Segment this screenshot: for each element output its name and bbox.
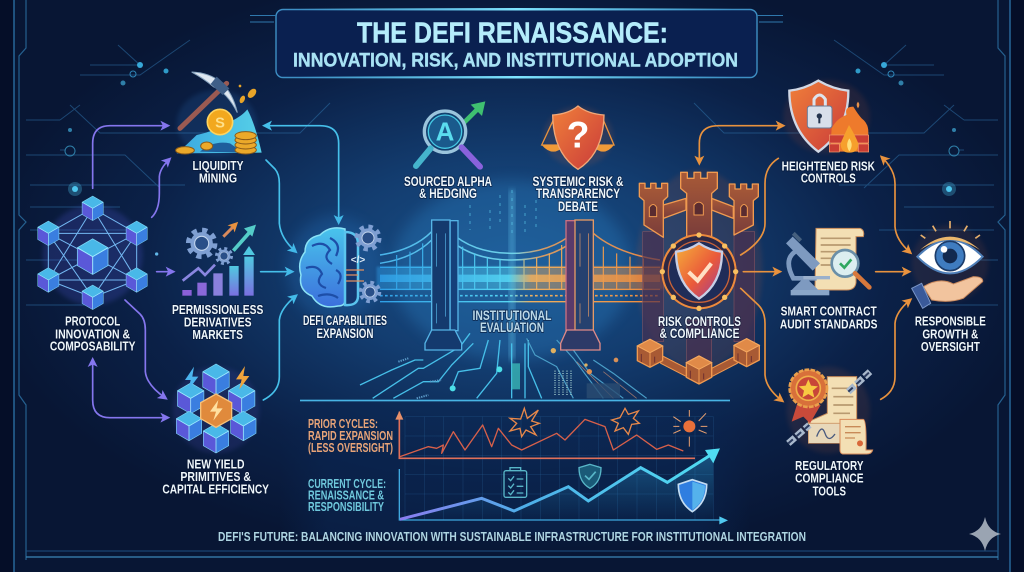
- label: protocol innovation: [50, 314, 136, 354]
- label: heightened risk: HEIGHTENED RISK: [782, 159, 875, 174]
- left section: protocol, mining, derivatives, yield: [38, 72, 339, 496]
- label: protocol innovation: COMPOSABILITY: [50, 339, 136, 354]
- chart: current cycle line: [399, 448, 728, 524]
- label: responsible growth: RESPONSIBLE: [915, 314, 986, 329]
- chart panel: prior and current cycles: [280, 400, 750, 535]
- label: systemic risk: [532, 174, 624, 214]
- icon: yield primitive blocks: [173, 364, 259, 453]
- label: systemic risk: TRANSPARENCY: [536, 186, 620, 201]
- label: protocol innovation: INNOVATION &: [55, 326, 130, 341]
- icon: systemic risk shield and scales: ?: [567, 113, 589, 155]
- label: prior cycles: (LESS OVERSIGHT): [308, 440, 393, 455]
- footer rules: [26, 551, 998, 557]
- left dark margin: [0, 0, 14, 572]
- icon: protocol composability network: [38, 196, 158, 309]
- label: new yield primitives: CAPITAL EFFICIENCY: [162, 481, 269, 496]
- arrows: cyan flows: [261, 126, 339, 400]
- label: risk controls: & COMPLIANCE: [660, 326, 740, 341]
- label: protocol innovation: PROTOCOL: [65, 314, 120, 329]
- castle towers: [639, 172, 758, 237]
- label: institutional evaluation: EVALUATION: [480, 320, 544, 335]
- right dark margin: [1010, 0, 1024, 572]
- left frame: [14, 0, 26, 572]
- label: systemic risk: SYSTEMIC RISK &: [532, 174, 624, 189]
- icon: derivatives chart and gears: [182, 224, 256, 296]
- bridge: [377, 220, 663, 350]
- label: smart contract audit: [780, 304, 878, 331]
- label: responsible growth: GROWTH &: [922, 326, 979, 341]
- icon: liquidity mining: S: [215, 115, 225, 131]
- label: liquidity mining: MINING: [199, 171, 237, 186]
- arrows: orange flows: [699, 126, 910, 401]
- label: risk controls: RISK CONTROLS: [658, 314, 741, 329]
- title heading: THE DEFI RENAISSANCE:: [357, 18, 668, 50]
- label: sourced alpha: [404, 174, 492, 201]
- label: new yield primitives: PRIMITIVES &: [180, 469, 251, 484]
- icon: liquidity mining: [176, 72, 262, 157]
- label: regulatory compliance: COMPLIANCE: [795, 471, 864, 486]
- icon: regulatory compliance certificate: [787, 367, 873, 454]
- right tower: [561, 220, 600, 350]
- label: liquidity mining: LIQUIDITY: [192, 158, 244, 173]
- label: institutional evaluation: [472, 308, 552, 335]
- footer caption: DEFI'S FUTURE: BALANCING INNOVATION WITH SUSTAINABLE INFRASTRUCTURE FOR INSTITUTIONAL INTEGRATION: [218, 529, 806, 544]
- right frame: [998, 0, 1010, 572]
- title banner: [250, 8, 783, 78]
- chart: prior cycles line: [395, 408, 707, 458]
- icon: eye over open hand: [912, 221, 988, 308]
- arrows: purple flows: [93, 126, 173, 418]
- label: regulatory compliance: TOOLS: [813, 483, 846, 498]
- label: defi capabilities: DEFI CAPABILITIES: [303, 313, 387, 328]
- left circuit decoration: [26, 40, 330, 305]
- label: prior cycles: PRIOR CYCLES:: [308, 416, 378, 431]
- label: prior cycles: RAPID EXPANSION: [308, 428, 393, 443]
- right section: risk controls, audit, regulatory, oversight: [699, 80, 988, 498]
- label: smart contract audit: SMART CONTRACT: [781, 304, 877, 319]
- label: smart contract audit: AUDIT STANDARDS: [780, 316, 878, 331]
- icon: heightened risk shield and firewall: [783, 80, 870, 153]
- label: permissionless derivatives: [172, 302, 263, 342]
- label: new yield primitives: [162, 456, 269, 496]
- label: responsible growth: [915, 314, 986, 354]
- label: sourced alpha: & HEDGING: [419, 186, 477, 201]
- label: permissionless derivatives: DERIVATIVES: [184, 315, 252, 330]
- castle lower walls: [643, 220, 755, 363]
- icon: risk controls castle: [636, 170, 762, 384]
- label: current cycle: RENAISSANCE &: [308, 488, 384, 502]
- castle shield ring: [662, 235, 736, 308]
- icon: sourced alpha magnifier: [416, 101, 485, 167]
- label: institutional evaluation: INSTITUTIONAL: [472, 308, 552, 323]
- label: regulatory compliance: REGULATORY: [795, 458, 864, 473]
- icon: microscope and audit scroll: [786, 228, 869, 295]
- label: risk controls: [658, 314, 741, 341]
- label: defi capabilities: [303, 313, 387, 341]
- label: new yield primitives: NEW YIELD: [187, 456, 245, 471]
- icon: sparkle watermark: [969, 517, 1001, 551]
- label: permissionless derivatives: PERMISSIONLESS: [172, 302, 263, 317]
- label: liquidity mining: [192, 158, 244, 186]
- label: heightened risk: CONTROLS: [801, 171, 856, 186]
- label: current cycle: RESPONSIBILITY: [308, 499, 384, 514]
- label: current cycle: CURRENT CYCLE:: [308, 476, 386, 491]
- label: heightened risk: [782, 159, 875, 186]
- icon: systemic risk shield and scales: [542, 106, 614, 169]
- label: systemic risk: DEBATE: [558, 199, 598, 214]
- label: sourced alpha: SOURCED ALPHA: [404, 174, 492, 189]
- left tower: [425, 220, 462, 350]
- icon: sourced alpha magnifier: A: [436, 117, 455, 147]
- label: prior cycles: [308, 416, 393, 455]
- label: responsible growth: OVERSIGHT: [921, 339, 980, 354]
- subtitle: INNOVATION, RISK, AND INSTITUTIONAL ADOPTION: [293, 50, 738, 72]
- right circuit decoration: [694, 40, 998, 305]
- castle lower wall links: [661, 355, 737, 377]
- label: defi capabilities: EXPANSION: [316, 326, 374, 341]
- label: permissionless derivatives: MARKETS: [192, 327, 243, 342]
- center glow and circuit floor: [360, 180, 647, 398]
- label: current cycle: [308, 476, 386, 514]
- icon: brain with code panel: [287, 216, 383, 320]
- code glyph: </>: [351, 255, 365, 266]
- label: regulatory compliance: [795, 458, 864, 498]
